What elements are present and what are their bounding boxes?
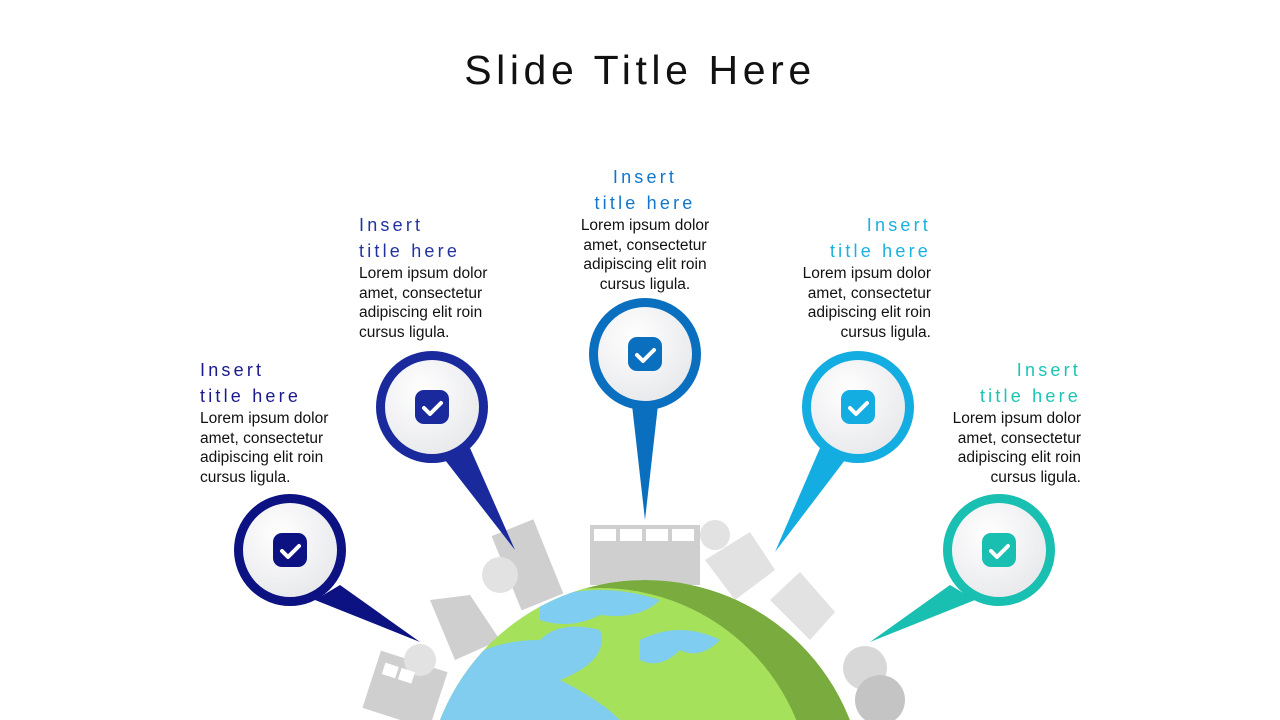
- text block 3: Lorem ipsum dolor amet, consectetur adipiscing elit roin cursus ligula.: [581, 217, 709, 292]
- pin 4: [775, 356, 910, 552]
- city silhouette: [362, 519, 905, 720]
- text block 5: title here: [980, 386, 1081, 406]
- text block 1: title here: [200, 386, 301, 406]
- text block 1: Lorem ipsum dolor amet, consectetur adipiscing elit roin cursus ligula.: [200, 410, 328, 486]
- text block 2: [359, 215, 488, 340]
- text block 2: Lorem ipsum dolor amet, consectetur adipiscing elit roin cursus ligula.: [359, 265, 487, 340]
- text block 3: title here: [594, 193, 696, 213]
- globe: [440, 580, 850, 720]
- text block 4: [803, 215, 931, 340]
- text block 5: Lorem ipsum dolor amet, consectetur adipiscing elit roin cursus ligula.: [953, 410, 1081, 486]
- text block 4: Lorem ipsum dolor amet, consectetur adipiscing elit roin cursus ligula.: [803, 265, 931, 340]
- text block 3: [581, 167, 709, 292]
- text block 3: Insert: [613, 167, 677, 187]
- text block 2: Insert: [359, 215, 423, 235]
- graphic: globe, city and pins: [234, 298, 1055, 720]
- pin 3: [594, 302, 696, 520]
- text block 5: [953, 360, 1081, 486]
- pin 5: [870, 498, 1050, 642]
- text block 1: Insert: [200, 360, 264, 380]
- title: Slide Title Here: [464, 47, 816, 93]
- pin 1: [238, 498, 420, 642]
- pin 2: [380, 356, 515, 550]
- text block 2: title here: [359, 241, 460, 261]
- text block 4: Insert: [867, 215, 931, 235]
- text block 4: title here: [830, 241, 931, 261]
- text block 1: [200, 360, 328, 486]
- text block 5: Insert: [1017, 360, 1081, 380]
